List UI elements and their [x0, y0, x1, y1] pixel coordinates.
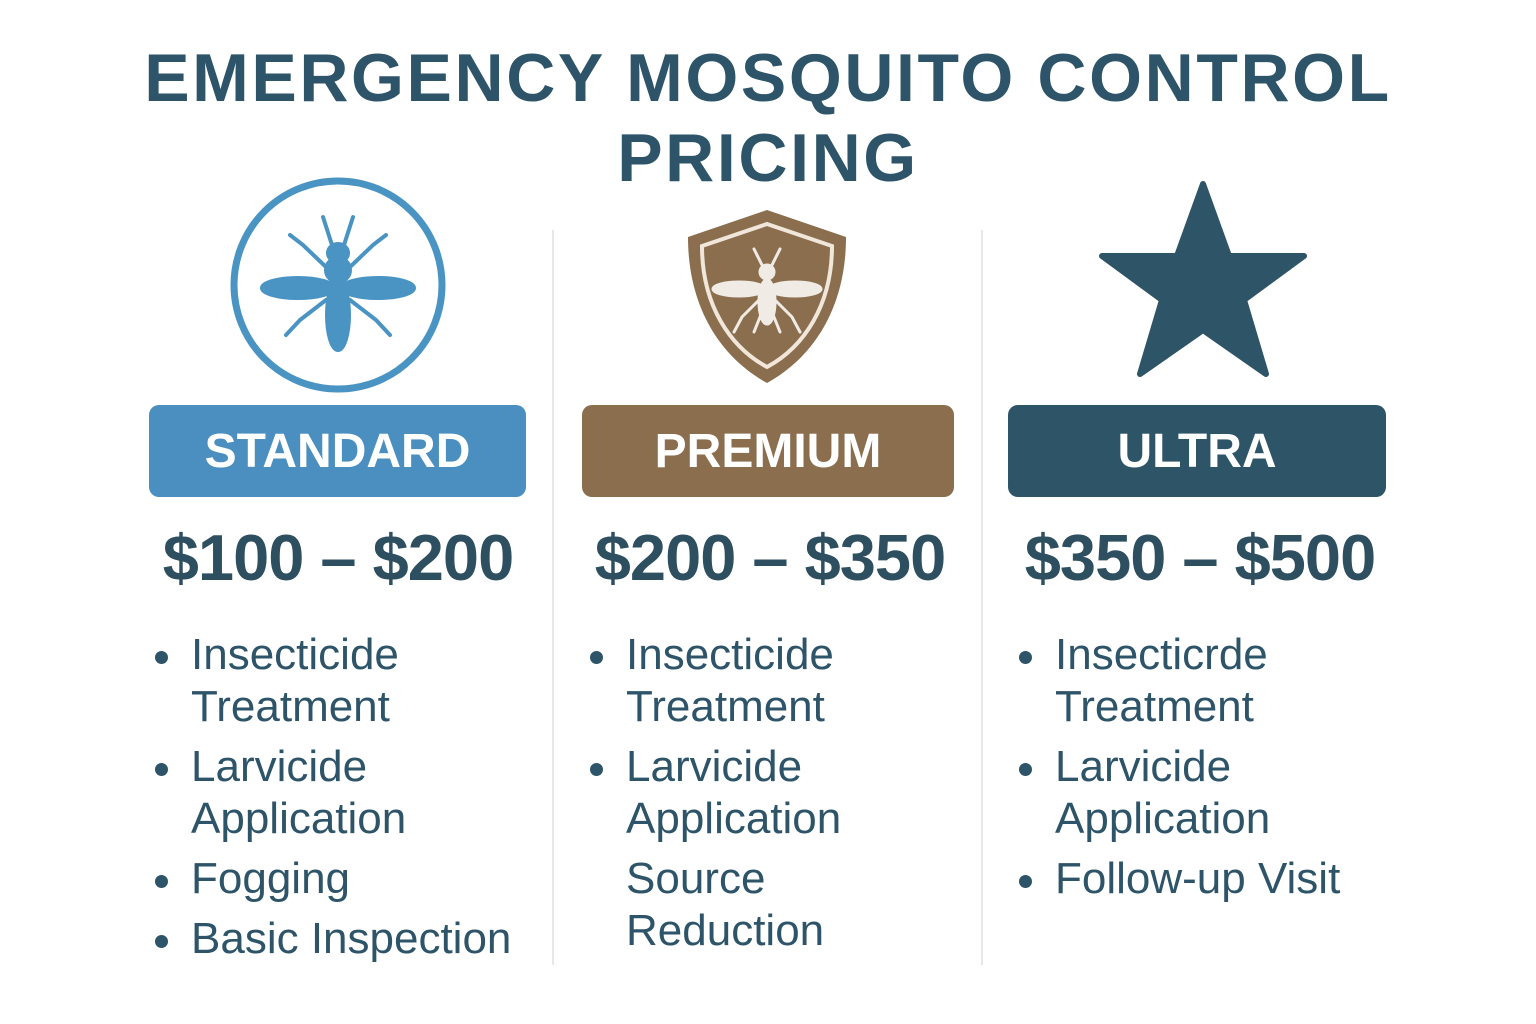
list: standard: Basic Inspection — [191, 914, 511, 963]
list: ultra: Treatment — [1055, 682, 1254, 731]
list: premium: Treatment — [626, 682, 825, 731]
list: premium: Reduction — [626, 906, 824, 955]
list: standard: Treatment — [191, 682, 390, 731]
list: standard: Larvicide — [191, 742, 367, 791]
list: ultra: Insecticrde — [1055, 630, 1268, 679]
title: PRICING — [617, 120, 919, 196]
badge: ultra — [1008, 405, 1386, 497]
title: EMERGENCY MOSQUITO CONTROL — [144, 40, 1392, 116]
badge: premium: PREMIUM — [655, 425, 881, 478]
list: ultra: Application — [1055, 794, 1270, 843]
badge: standard — [149, 405, 526, 497]
price: standard: $100 – $200 — [163, 521, 513, 594]
price: premium: $200 – $350 — [595, 521, 945, 594]
list: standard: Application — [191, 794, 406, 843]
icon: shield — [688, 210, 846, 383]
list: premium — [590, 630, 841, 955]
icon: star — [1099, 181, 1307, 377]
list: premium: Application — [626, 794, 841, 843]
list: standard — [155, 630, 511, 963]
list: premium: Larvicide — [626, 742, 802, 791]
list: premium: Insecticide — [626, 630, 834, 679]
icon: mosquito circle — [230, 178, 446, 392]
badge: standard: STANDARD — [205, 425, 470, 478]
price: ultra: $350 – $500 — [1025, 521, 1375, 594]
list: ultra: Follow-up Visit — [1055, 854, 1340, 903]
badge: premium — [582, 405, 954, 497]
list: standard: Fogging — [191, 854, 350, 903]
list: ultra — [1019, 630, 1340, 903]
list: standard: Insecticide — [191, 630, 399, 679]
title — [144, 40, 1392, 196]
list: ultra: Larvicide — [1055, 742, 1231, 791]
badge: ultra: ULTRA — [1117, 425, 1277, 478]
list: premium: Source — [626, 854, 765, 903]
